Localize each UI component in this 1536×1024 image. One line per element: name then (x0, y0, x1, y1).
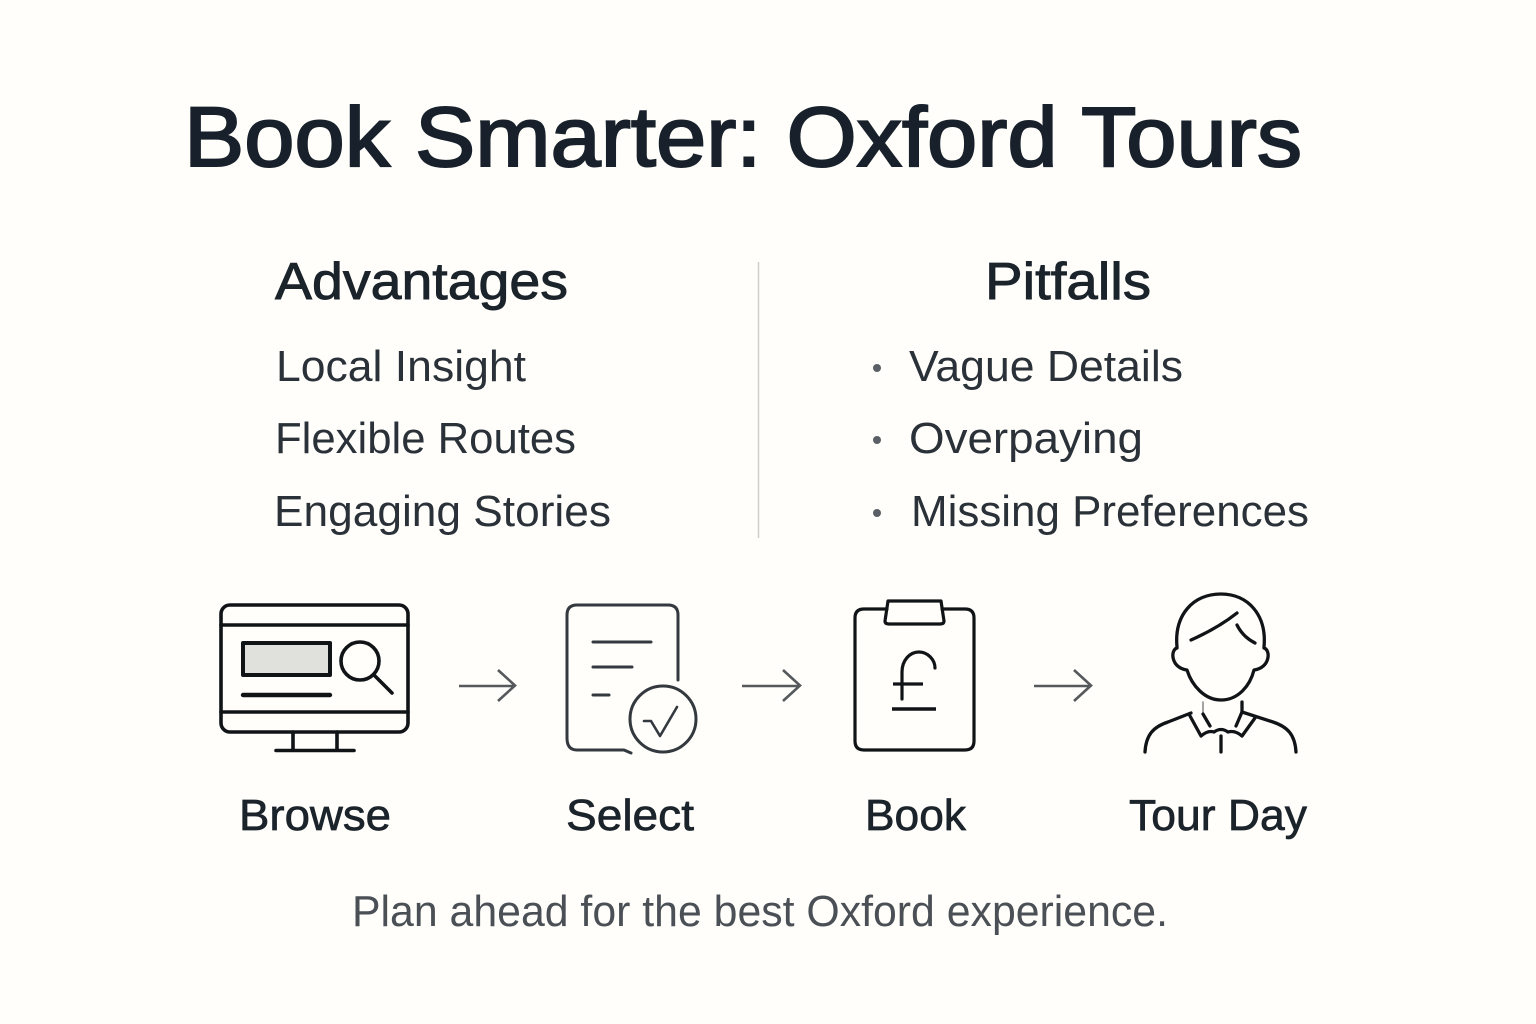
step label: Tour Day: Tour Day (1129, 791, 1307, 840)
arrow: book to tour day (1034, 670, 1091, 701)
list: pitfalls: Overpaying (909, 414, 1143, 463)
list: pitfalls: Vague Details (909, 342, 1183, 391)
step label: Book: Book (865, 791, 967, 840)
list: advantages (274, 342, 611, 536)
step label: Select: Select (566, 791, 694, 840)
heading: pitfalls: Pitfalls (985, 253, 1151, 311)
list: advantages: Engaging Stories (274, 487, 611, 536)
list: advantages: Flexible Routes (275, 414, 576, 463)
step label: Browse: Browse (239, 791, 391, 840)
icon: book clipboard with pound sign (855, 601, 974, 750)
arrow: browse to select (459, 670, 515, 701)
panel: advantages (274, 253, 611, 536)
list: pitfalls: Missing Preferences (911, 487, 1309, 536)
arrow: select to book (742, 670, 800, 701)
icon: tour day person (1145, 594, 1296, 752)
list: advantages: Local Insight (276, 342, 526, 391)
footer tagline: Plan ahead for the best Oxford experience. (352, 887, 1168, 936)
panel: pitfalls (873, 253, 1309, 536)
icon: browse monitor (221, 605, 408, 750)
title: Book Smarter: Oxford Tours (184, 90, 1302, 184)
icon: select document with check (567, 605, 696, 753)
heading: advantages: Advantages (275, 253, 568, 311)
list: pitfalls (873, 342, 1309, 536)
